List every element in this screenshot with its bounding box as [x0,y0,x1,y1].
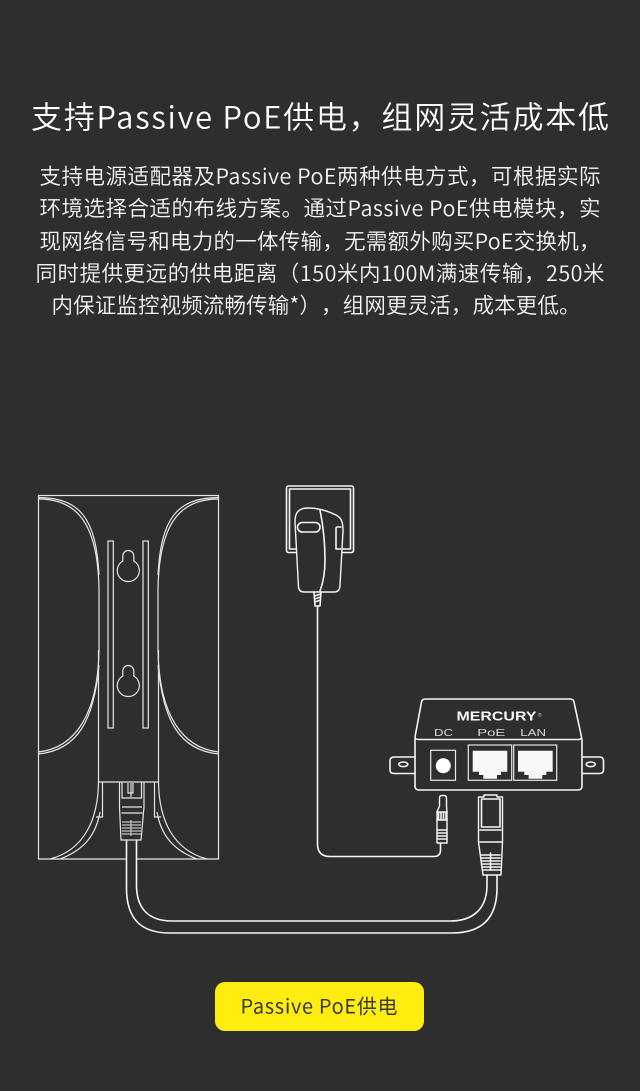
injector ears [390,757,415,774]
registered mark: ® [538,712,542,719]
body paragraph [36,160,604,320]
port labels: DC [434,728,453,739]
icon: keyhole top [117,550,139,582]
body paragraph: 支持电源适配器及Passive PoE两种供电方式，可根据实际 [40,160,600,191]
icon: wall outlet and power adapter [286,486,440,856]
icon: PoE injector [390,699,604,790]
injector body [415,739,582,790]
body paragraph: 同时提供更远的供电距离（150米内100M满速传输，250米 [36,257,604,288]
cable: antenna to PoE injector [126,840,497,933]
body paragraph: 环境选择合适的布线方案。通过Passive PoE供电模块，实 [40,192,600,223]
icon: RJ45 plug to PoE port [478,795,502,875]
power cable [318,606,440,856]
icon: RJ45 connector in antenna [120,782,144,840]
button: Passive PoE power: Passive PoE供电 [240,990,398,1020]
icon: DC jack plug [437,796,447,843]
button: Passive PoE power [215,982,424,1031]
LAN port [514,745,557,780]
title: 支持Passive PoE供电，组网灵活成本低 [31,92,609,138]
port labels [434,728,546,739]
PoE port [468,745,512,780]
port labels: LAN [520,728,546,739]
port labels: PoE [477,728,506,739]
body paragraph: 内保证监控视频流畅传输*），组网更灵活，成本更低。 [52,289,580,320]
icon: antenna back view [38,496,218,859]
brand name: MERCURY [456,710,537,724]
body paragraph: 现网络信号和电力的一体传输，无需额外购买PoE交换机， [40,225,600,256]
icon: keyhole bottom [117,666,139,697]
DC port [431,750,456,780]
